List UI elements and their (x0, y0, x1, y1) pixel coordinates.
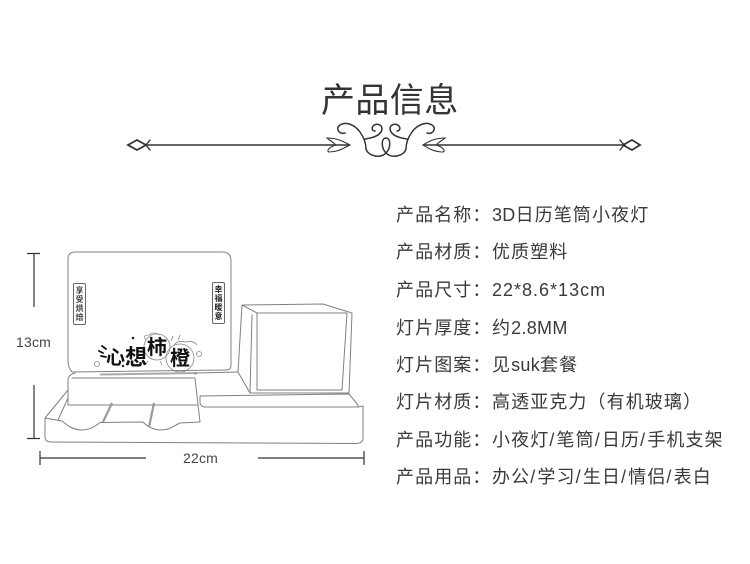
spec: panel material: 灯片材质： (396, 392, 492, 412)
right arrow line with diamond (423, 138, 640, 152)
logo text: 心 (106, 347, 125, 369)
height label: 13cm (16, 334, 51, 350)
logo dots (122, 337, 134, 367)
spec: pattern: 灯片图案： (396, 355, 492, 375)
height dimension (16, 253, 51, 438)
spec: material: 优质塑料 (492, 242, 568, 262)
title: 产品信息 (321, 82, 459, 120)
spec: material: 产品材质： (396, 242, 492, 262)
tray dividers (103, 403, 154, 427)
spec: thickness: 2.8MM (511, 318, 568, 338)
height bracket bottom (27, 385, 40, 438)
spec: use: 办公/学习/生日/情侣/表白 (492, 467, 712, 487)
lower block (68, 372, 238, 422)
phone deck (200, 372, 358, 407)
spec: function: 小夜灯/笔筒/日历/手机支架 (492, 430, 724, 450)
spec: name: 产品名称： (396, 205, 492, 225)
spec: size: 产品尺寸： (396, 280, 492, 300)
logo text: 柿 (147, 336, 167, 359)
spec: panel material: 高透亚克力（有机玻璃） (492, 392, 702, 412)
spec: function: 产品功能： (396, 430, 492, 450)
left tag: 受 (76, 294, 84, 304)
product line drawing (45, 252, 363, 444)
width bracket right (258, 451, 364, 465)
acrylic panel (68, 252, 231, 372)
spec: use: 产品用品： (396, 467, 492, 487)
width dimension (40, 450, 364, 466)
tray (45, 390, 363, 444)
spec: name: 日历笔筒小夜灯 (516, 205, 649, 225)
spec: thickness: 约 (492, 318, 511, 338)
stand slot (100, 373, 197, 374)
left arrow line with diamond (128, 138, 350, 152)
central swirl (338, 123, 434, 156)
logo sparkles (99, 346, 106, 357)
spec: size: 22*8.6*13cm (492, 280, 606, 300)
logo artwork (94, 333, 202, 372)
left tag (74, 284, 86, 324)
right tag: 幸 (214, 284, 222, 294)
pen holder (238, 304, 352, 393)
left tag: 烘 (76, 303, 84, 313)
product specification list (396, 205, 724, 487)
left tag: 焙 (76, 312, 84, 322)
right tag: 暖 (214, 302, 222, 312)
spec: pattern: suk套餐 (511, 355, 578, 375)
left tag: 享 (76, 285, 84, 295)
height bracket top (27, 253, 40, 307)
right tag (212, 282, 224, 324)
spec: thickness: 灯片厚度： (396, 318, 492, 338)
width bracket left (40, 451, 146, 465)
spec: pattern: 见 (492, 355, 511, 375)
logo circles (94, 333, 202, 372)
right tag: 意 (214, 311, 222, 321)
width label: 22cm (183, 450, 218, 466)
right tag: 福 (214, 293, 222, 303)
spec: name: 3D (492, 205, 516, 225)
logo text: 橙 (170, 347, 190, 370)
ornamental divider (128, 123, 640, 156)
logo text: 想 (125, 345, 147, 370)
